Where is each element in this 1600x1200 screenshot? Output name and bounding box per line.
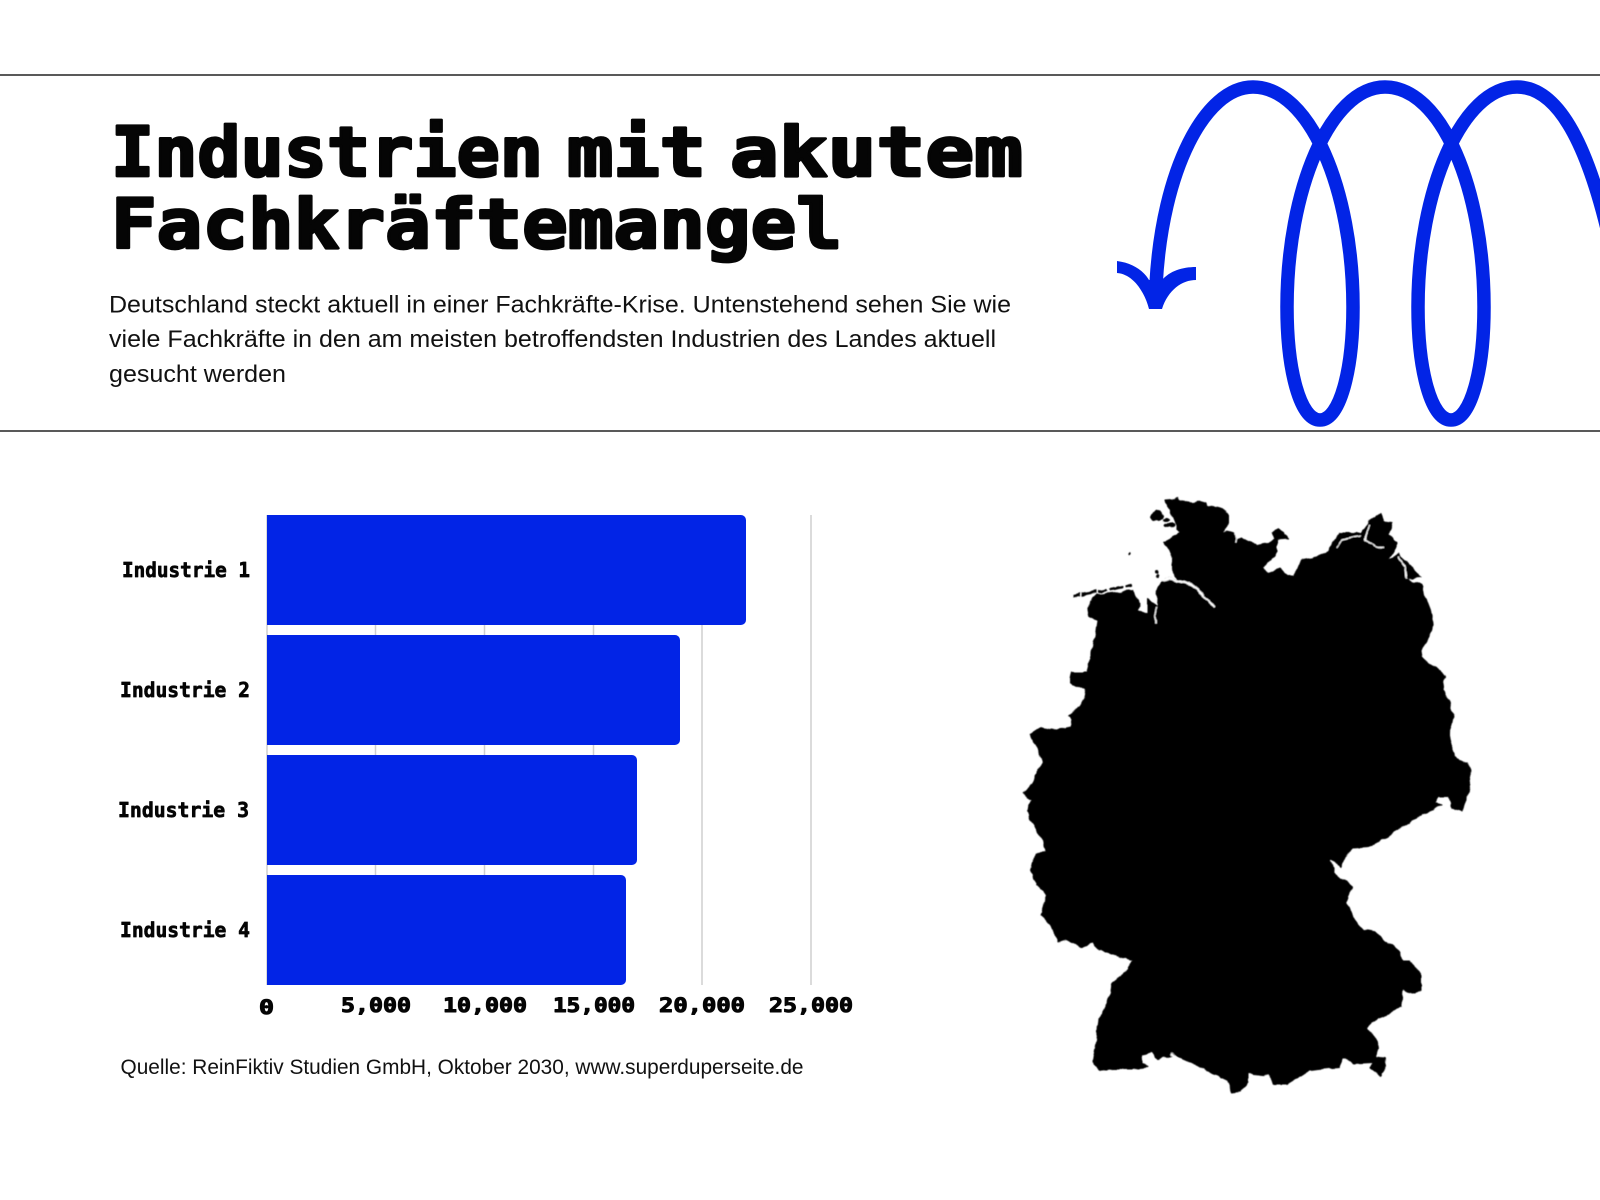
title xyxy=(111,113,1023,265)
North Frisian islands xyxy=(1128,510,1175,578)
value axis labels: 0 xyxy=(259,996,274,1019)
category labels: Industrie 4 xyxy=(120,918,250,942)
bar: Industrie 1 xyxy=(267,515,746,625)
category labels: Industrie 3 xyxy=(118,798,249,822)
bar: Industrie 2 xyxy=(267,635,680,745)
icon: blue looping arrow xyxy=(1117,87,1600,420)
value axis labels: 25,000 xyxy=(769,994,853,1017)
title: Fachkräftemangel xyxy=(111,185,842,265)
intro text: Deutschland steckt aktuell in einer Fachkräfte-Krise. Untenstehend sehen Sie wie xyxy=(109,292,1011,318)
intro text: viele Fachkräfte in den am meisten betroffendsten Industrien des Landes aktuell xyxy=(109,326,996,353)
value axis labels: 5,000 xyxy=(341,994,411,1017)
value axis labels xyxy=(259,994,853,1019)
intro text xyxy=(109,292,1011,388)
value axis labels: 10,000 xyxy=(443,994,527,1017)
East Frisian islands xyxy=(1072,585,1132,597)
map of Germany xyxy=(1023,499,1471,1093)
category labels: Industrie 1 xyxy=(122,558,250,582)
title: mit xyxy=(567,113,706,193)
title: Industrien xyxy=(111,113,543,193)
intro text: gesucht werden xyxy=(109,361,286,388)
bar: Industrie 4 xyxy=(267,875,626,985)
bar: Industrie 3 xyxy=(267,755,637,865)
value axis labels: 20,000 xyxy=(659,994,745,1017)
title: akutem xyxy=(730,113,1023,193)
category labels: Industrie 2 xyxy=(120,678,250,702)
bar chart xyxy=(118,515,853,1019)
value axis labels: 15,000 xyxy=(553,994,635,1017)
category labels xyxy=(118,558,250,942)
source note: Quelle: ReinFiktiv Studien GmbH, Oktober 2030, www.superduperseite.de xyxy=(120,1055,804,1079)
